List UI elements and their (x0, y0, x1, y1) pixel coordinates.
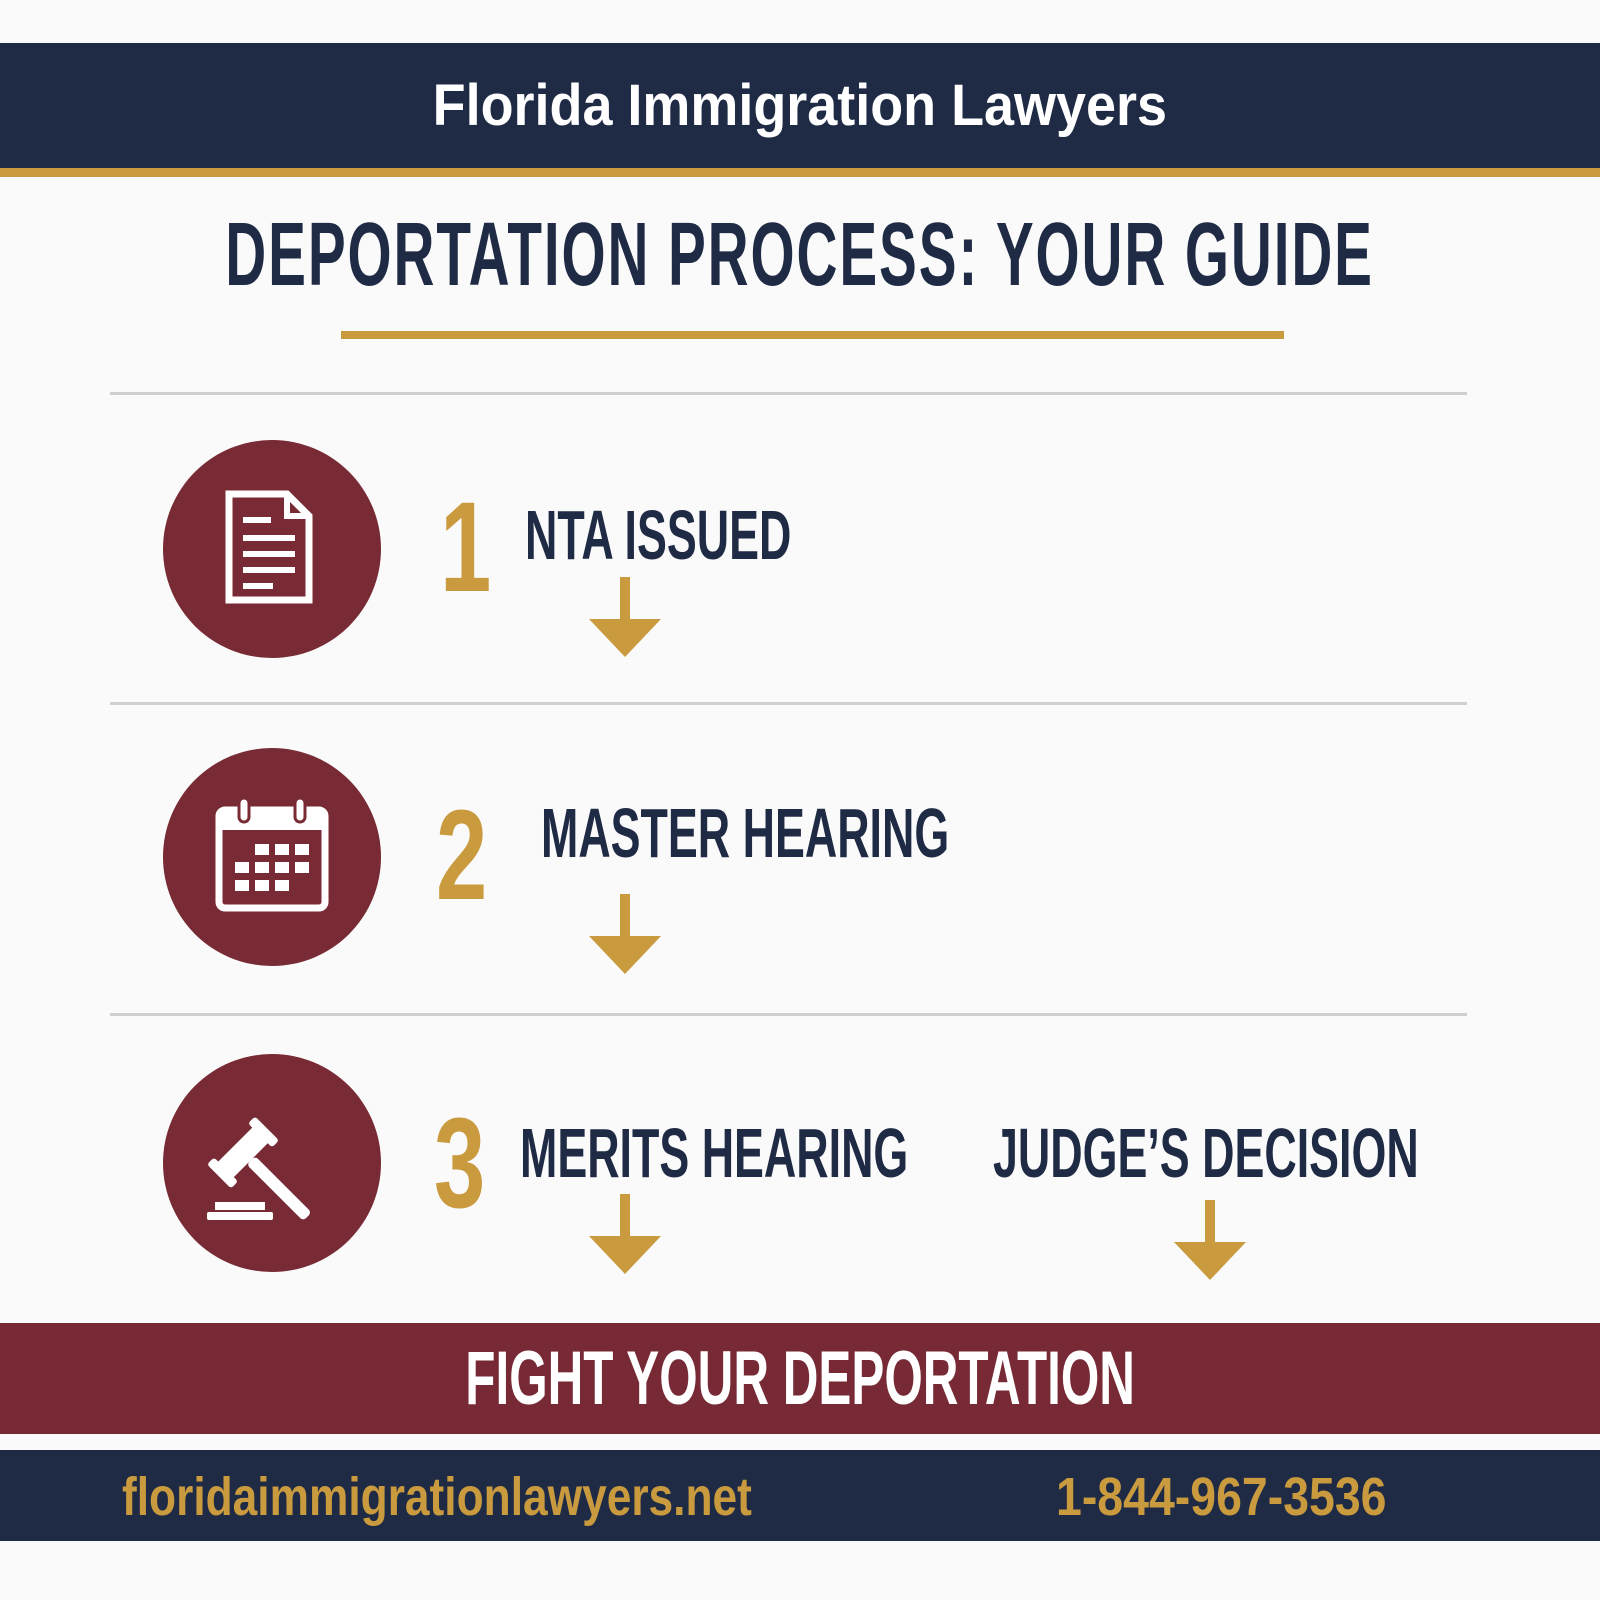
number 1: 1 (440, 476, 491, 619)
icon: gavel (163, 1054, 381, 1272)
step 3 (163, 1054, 1419, 1280)
label: judge's decision: JUDGE’S DECISION (993, 1114, 1419, 1192)
label: NTA ISSUED (525, 496, 791, 574)
step 1 (163, 440, 791, 658)
website: floridaimmigrationlawyers.net (122, 1467, 752, 1527)
call to action bar: FIGHT YOUR DEPORTATION (465, 1336, 1135, 1421)
number 2: 2 (436, 784, 487, 927)
label: MASTER HEARING (541, 794, 949, 872)
arrow (589, 894, 661, 974)
phone: 1-844-967-3536 (1056, 1467, 1387, 1527)
call to action bar (0, 1323, 1600, 1434)
step 2 (163, 748, 949, 974)
header bar: Florida Immigration Lawyers (433, 73, 1167, 138)
icon: calendar (163, 748, 381, 966)
header bar (0, 43, 1600, 168)
footer bar (0, 1450, 1600, 1541)
icon: document (163, 440, 381, 658)
title: DEPORTATION PROCESS: YOUR GUIDE (226, 205, 1374, 305)
arrow (1174, 1200, 1246, 1280)
arrow (589, 577, 661, 657)
arrow (589, 1194, 661, 1274)
number 3: 3 (434, 1092, 485, 1235)
label: merits hearing: MERITS HEARING (520, 1114, 908, 1192)
